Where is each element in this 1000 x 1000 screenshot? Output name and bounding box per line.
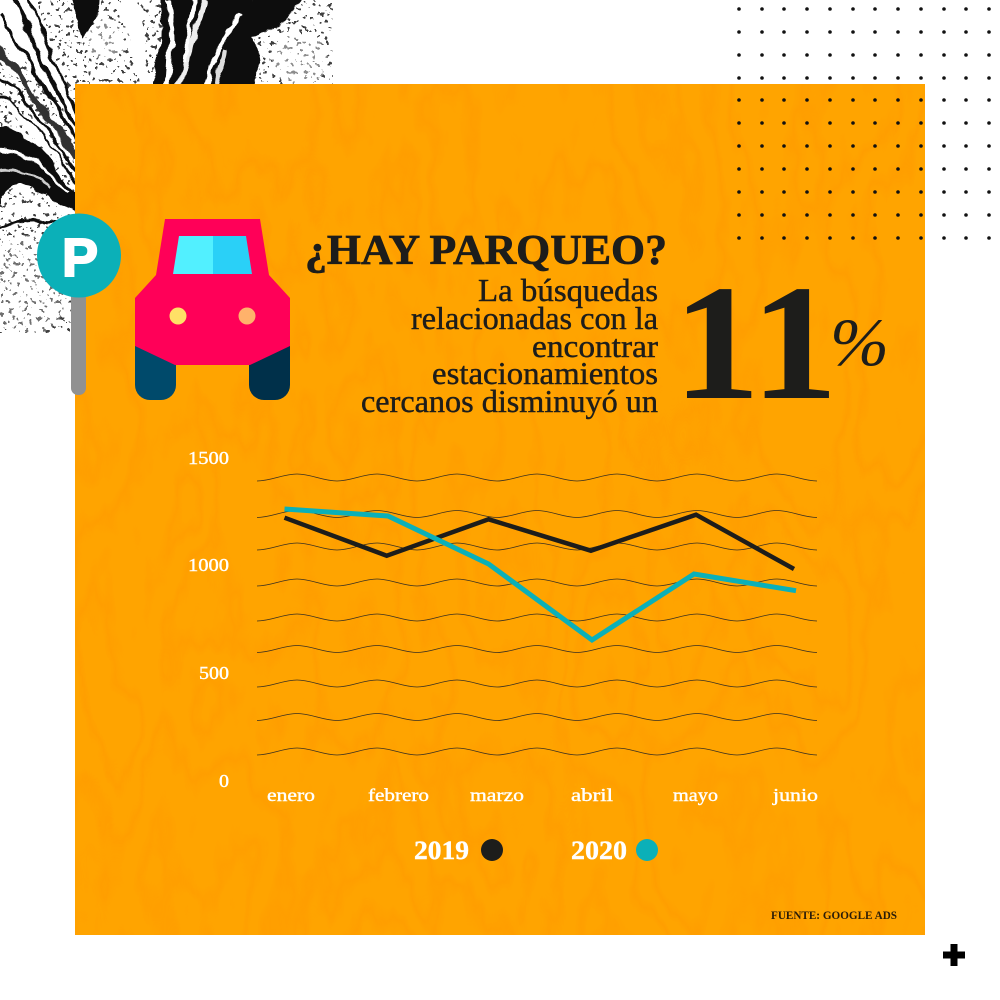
windshield right xyxy=(213,236,252,274)
x axis labels: febrero xyxy=(368,785,429,805)
x axis labels: abril xyxy=(571,785,613,805)
legend 2020 marker xyxy=(636,839,658,861)
dot grid decoration xyxy=(737,7,991,240)
description text: encontrar xyxy=(532,328,658,364)
letter P: P xyxy=(62,228,98,288)
legend 2020 label: 2020 xyxy=(571,836,627,865)
description text: cercanos disminuyó un xyxy=(361,383,658,419)
windshield left xyxy=(173,236,213,274)
title: ¿HAY PARQUEO? xyxy=(305,228,667,274)
plus icon xyxy=(943,944,965,966)
percent sign: % xyxy=(830,304,889,380)
orange marbled panel xyxy=(75,84,925,935)
big number 11 percent xyxy=(673,251,889,434)
description text: estacionamientos xyxy=(432,355,658,391)
sign pole xyxy=(71,285,86,395)
2019 data line xyxy=(284,515,794,569)
wavy grid lines xyxy=(257,474,817,755)
y axis labels: 1000 xyxy=(188,555,229,575)
right wheel xyxy=(249,340,290,400)
legend 2019 label: 2019 xyxy=(414,836,469,865)
y axis labels xyxy=(188,448,229,791)
icon: parking sign xyxy=(37,214,121,395)
legend 2019 marker xyxy=(481,839,503,861)
legend xyxy=(414,836,658,865)
x axis labels: enero xyxy=(267,785,315,805)
y axis labels: 500 xyxy=(199,663,229,683)
line chart xyxy=(188,448,818,805)
car body xyxy=(135,219,290,365)
description text: relacionadas con la xyxy=(411,300,658,336)
number 11: 11 xyxy=(673,251,838,434)
y axis labels: 0 xyxy=(219,771,229,791)
right headlight xyxy=(238,308,256,324)
x axis labels: junio xyxy=(772,785,818,805)
black and white marbled texture xyxy=(0,0,333,335)
description text: La búsquedas xyxy=(478,272,658,308)
x axis labels: mayo xyxy=(673,785,718,805)
sign disc xyxy=(37,214,121,298)
x axis labels: marzo xyxy=(470,785,524,805)
x axis labels xyxy=(267,785,818,805)
left headlight xyxy=(170,308,186,324)
left wheel xyxy=(135,340,176,400)
y axis labels: 1500 xyxy=(188,448,229,468)
description text xyxy=(361,272,658,419)
icon: red car xyxy=(135,219,290,400)
source note: FUENTE: GOOGLE ADS xyxy=(771,910,897,922)
2020 data line xyxy=(284,509,796,640)
